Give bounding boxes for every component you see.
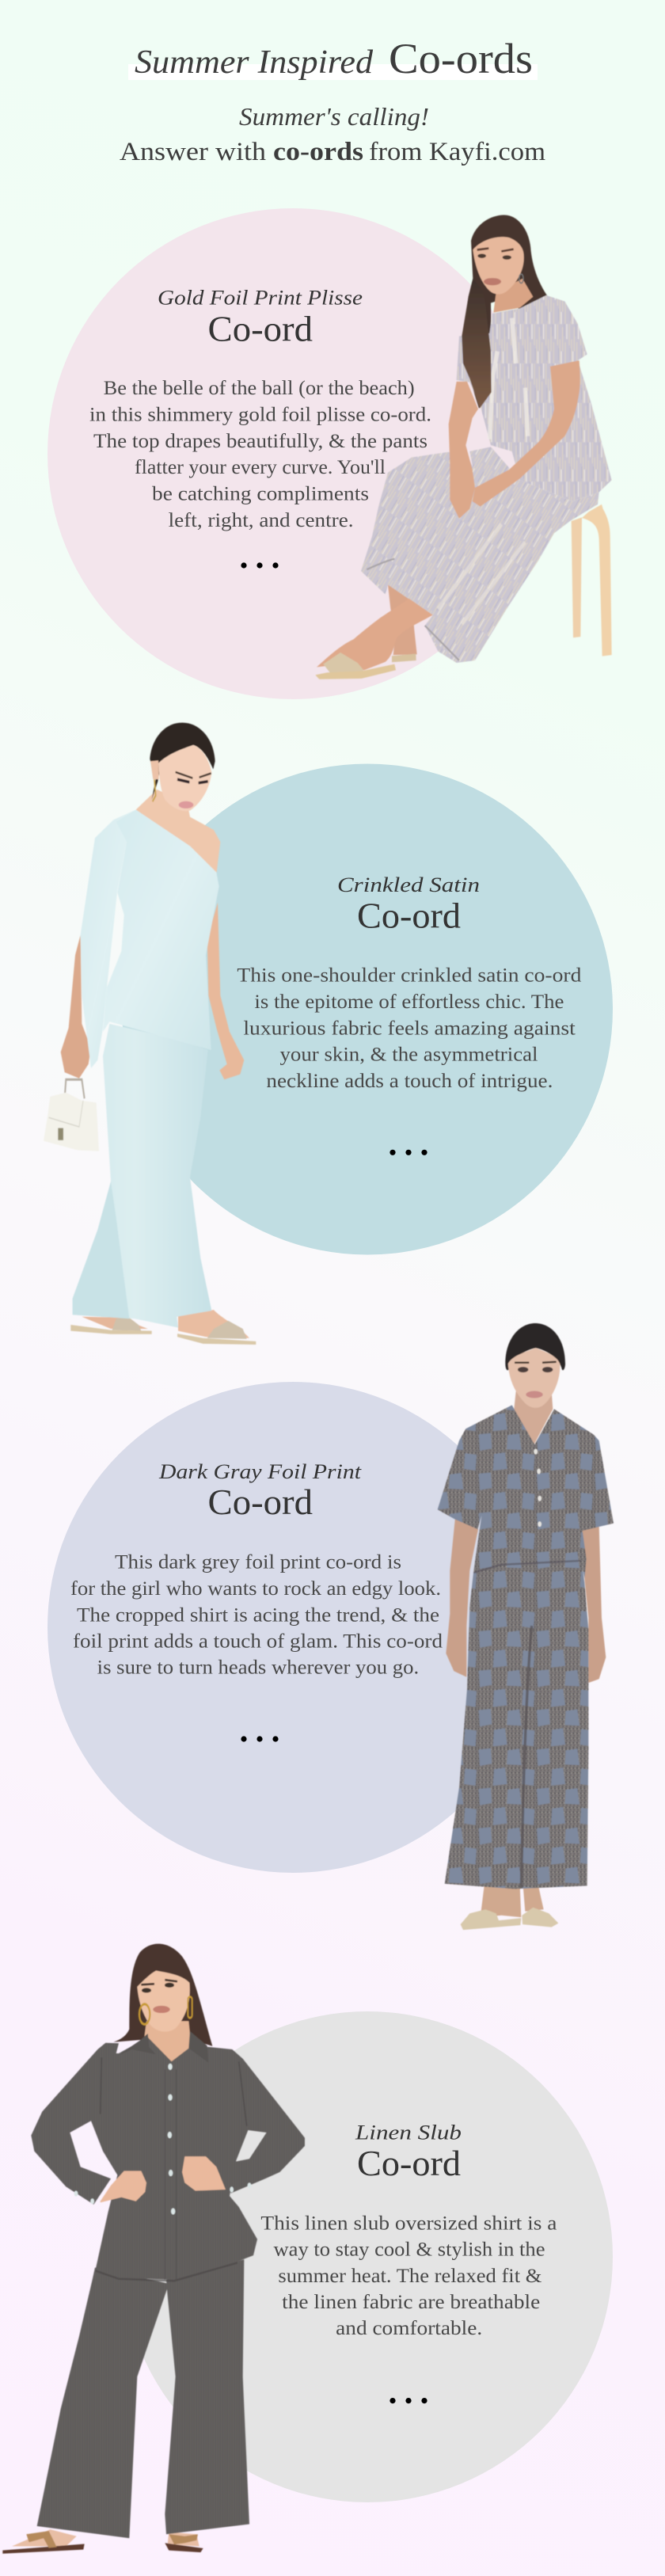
subtitle italic: Summer's calling! bbox=[239, 102, 429, 131]
co-ord heading: Co-ord bbox=[207, 1482, 313, 1522]
description: This dark grey foil print co-ord is bbox=[115, 1552, 401, 1573]
pants bbox=[361, 447, 599, 663]
description: The top drapes beautifully, & the pants bbox=[93, 431, 428, 452]
shirt hem shadow bbox=[473, 1561, 580, 1573]
subtitle line: from Kayfi.com bbox=[369, 138, 545, 166]
collar bbox=[119, 2031, 208, 2063]
product name: Gold Foil Print Plisse bbox=[158, 287, 363, 310]
back leg and sandal bbox=[388, 584, 417, 662]
header bbox=[120, 35, 545, 166]
description: flatter your every curve. You'll bbox=[135, 457, 386, 478]
description bbox=[89, 378, 431, 531]
description: in this shimmery gold foil plisse co-ord. bbox=[89, 404, 431, 425]
description bbox=[237, 965, 582, 1092]
panel: gold foil print plisse bbox=[48, 208, 612, 699]
placket and buttons bbox=[74, 2064, 251, 2280]
description: for the girl who wants to rock an edgy look. bbox=[70, 1578, 441, 1600]
hands bbox=[101, 2156, 226, 2202]
co-ord heading: Co-ord bbox=[357, 2143, 461, 2183]
circle background bbox=[122, 763, 613, 1254]
shirt bbox=[438, 1405, 614, 1578]
description: foil print adds a touch of glam. This co-ord bbox=[73, 1631, 443, 1653]
hair bbox=[150, 723, 215, 800]
face bbox=[473, 237, 524, 295]
arms bbox=[449, 360, 580, 519]
figure: standing model in linen slub bbox=[2, 1944, 305, 2554]
pants bbox=[37, 2259, 249, 2538]
co-ord heading: Co-ord bbox=[207, 309, 313, 348]
hair bbox=[505, 1323, 565, 1370]
description bbox=[70, 1552, 443, 1679]
description: The cropped shirt is acing the trend, & the bbox=[77, 1604, 439, 1626]
description: your skin, & the asymmetrical bbox=[280, 1044, 538, 1066]
title: Summer Inspired bbox=[135, 44, 374, 81]
left foot and sandal bbox=[2, 2529, 85, 2554]
description: way to stay cool & stylish in the bbox=[274, 2239, 545, 2261]
description: and comfortable. bbox=[336, 2318, 482, 2339]
description: left, right, and centre. bbox=[169, 510, 354, 531]
figure: seated model in gold foil plisse bbox=[315, 215, 612, 679]
ellipsis dots bbox=[241, 562, 279, 569]
subtitle line bbox=[120, 138, 545, 166]
left arm bbox=[61, 935, 91, 1079]
shirt buttons bbox=[534, 1449, 542, 1527]
panel: dark gray foil print bbox=[48, 1323, 614, 1930]
stool bbox=[572, 504, 612, 656]
panel: linen slub bbox=[2, 1944, 613, 2554]
satin top bbox=[103, 809, 219, 1050]
product name: Crinkled Satin bbox=[337, 873, 480, 896]
neck bbox=[144, 2021, 192, 2065]
ellipsis dots bbox=[390, 1150, 428, 1155]
front leg bbox=[317, 599, 433, 670]
description: is the epitome of effortless chic. The bbox=[254, 991, 564, 1013]
face bbox=[137, 1970, 192, 2032]
front foot and sandal bbox=[177, 1310, 256, 1345]
figure: standing model in foil print bbox=[438, 1323, 614, 1930]
pants bbox=[73, 1024, 211, 1328]
circle background bbox=[48, 1382, 538, 1873]
description: This linen slub oversized shirt is a bbox=[260, 2213, 557, 2235]
arms bbox=[446, 1517, 606, 1683]
panel: crinkled satin bbox=[44, 723, 613, 1345]
title: Co-ords bbox=[389, 35, 533, 82]
description: the linen fabric are breathable bbox=[282, 2292, 540, 2313]
description: be catching compliments bbox=[152, 484, 369, 505]
right arm bbox=[207, 903, 244, 1079]
left sleeve bbox=[31, 2043, 119, 2205]
neck and shoulder bbox=[136, 790, 220, 874]
product name: Dark Gray Foil Print bbox=[158, 1460, 362, 1483]
description: summer heat. The relaxed fit & bbox=[278, 2266, 542, 2287]
sleeve bbox=[81, 809, 136, 1068]
product name: Linen Slub bbox=[355, 2121, 462, 2144]
ellipsis dots bbox=[241, 1736, 279, 1742]
subtitle line: Answer with bbox=[120, 138, 267, 166]
description: This one-shoulder crinkled satin co-ord bbox=[237, 965, 582, 987]
right foot and sandal bbox=[165, 2532, 203, 2552]
handbag bbox=[44, 1079, 99, 1151]
neck bbox=[493, 279, 533, 313]
description: neckline adds a touch of intrigue. bbox=[266, 1071, 553, 1092]
face bbox=[150, 745, 211, 811]
top bbox=[457, 295, 612, 501]
face bbox=[508, 1348, 560, 1408]
circle background bbox=[122, 2011, 613, 2502]
title highlight bar bbox=[128, 64, 538, 80]
hair front strands bbox=[462, 279, 492, 409]
figure: standing model in crinkled satin bbox=[44, 723, 256, 1345]
right sleeve bbox=[208, 2047, 305, 2194]
co-ord heading: Co-ord bbox=[357, 895, 461, 935]
rear foot and sandal bbox=[70, 1317, 152, 1334]
hair bbox=[113, 1944, 212, 2046]
description: is sure to turn heads wherever you go. bbox=[97, 1657, 419, 1679]
front sandal bbox=[315, 653, 396, 679]
leg seam bbox=[521, 1626, 532, 1888]
description: Be the belle of the ball (or the beach) bbox=[104, 378, 415, 399]
neck bbox=[514, 1391, 553, 1445]
pants bbox=[445, 1554, 588, 1889]
subtitle line: co-ords bbox=[273, 138, 363, 166]
circle background bbox=[48, 208, 538, 699]
description: luxurious fabric feels amazing against bbox=[243, 1018, 576, 1039]
rear pant shade bbox=[73, 1181, 129, 1318]
ellipsis dots bbox=[390, 2398, 428, 2403]
feet and sandals bbox=[461, 1885, 558, 1930]
shirt bbox=[31, 2038, 305, 2280]
title bbox=[135, 35, 533, 82]
hair back bbox=[459, 215, 548, 409]
shirt fold shadows bbox=[96, 2057, 247, 2281]
shirt body bbox=[91, 2038, 257, 2280]
description bbox=[260, 2213, 557, 2339]
